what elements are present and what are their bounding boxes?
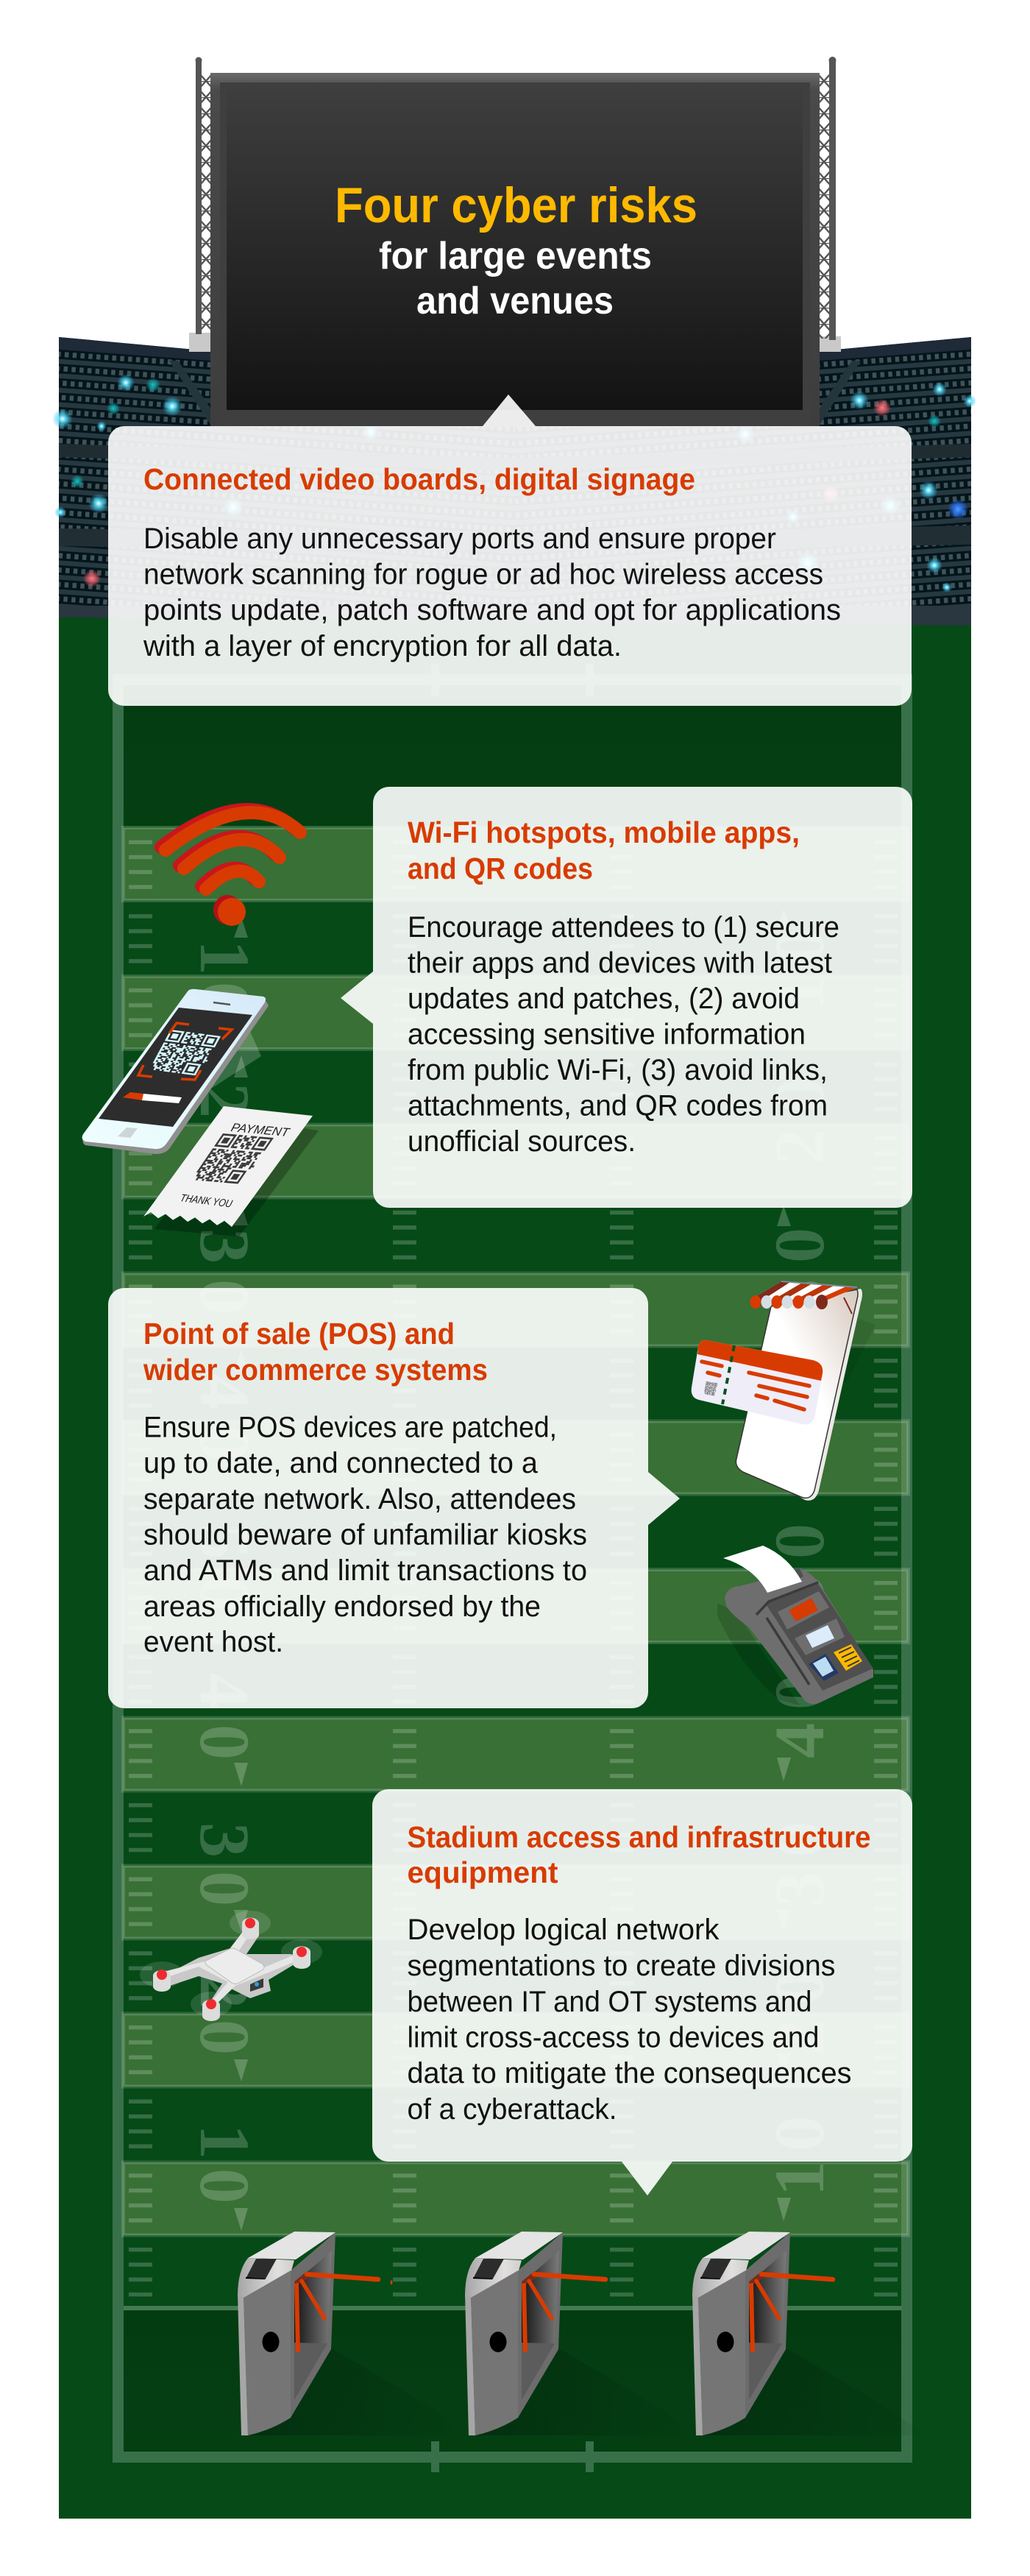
yard numbers left: 5 (185, 1524, 264, 1560)
body text (143, 523, 841, 662)
yard numbers left: 3 (185, 1228, 264, 1264)
panel: wi-fi hotspots (341, 787, 912, 1208)
icon: mobile storefront with ticket (692, 1281, 876, 1501)
yard numbers right: 0 (760, 1970, 839, 2005)
body text: from public Wi-Fi, (3) avoid links, (408, 1054, 828, 1086)
yard numbers left (169, 917, 264, 2231)
body text: Encourage attendees to (1) secure (408, 911, 839, 944)
yard numbers right: 1 (760, 976, 839, 1011)
yard numbers right: 0 (760, 1822, 839, 1857)
yard numbers left: 0 (185, 1426, 264, 1461)
yard numbers right: 1 (760, 2161, 839, 2196)
yard numbers left: 3 (185, 1822, 264, 1858)
yard numbers left: 2 (185, 1083, 264, 1118)
heading (408, 1820, 871, 1889)
panel: stadium access (372, 1789, 912, 2195)
body text: up to date, and connected to a (143, 1447, 539, 1479)
heading: Connected video boards, digital signage (143, 462, 695, 496)
body text: of a cyberattack. (408, 2093, 617, 2126)
body text: accessing sensitive information (408, 1019, 806, 1051)
yard numbers left: 1 (185, 940, 264, 975)
body text: data to mitigate the consequences (408, 2057, 852, 2090)
yard numbers left: 4 (185, 1374, 264, 1409)
icon: drone (140, 1911, 322, 2021)
yard numbers right: 2 (760, 1129, 839, 1164)
icon: turnstile 1 (238, 2232, 471, 2435)
video board with truss (189, 57, 841, 427)
yard numbers left: 0 (185, 2020, 264, 2055)
title: Four cyber risks (335, 177, 697, 233)
body text: Ensure POS devices are patched, (143, 1412, 557, 1444)
yard numbers right: 0 (760, 1228, 839, 1263)
yard numbers right: 0 (760, 1377, 839, 1412)
title: for large events (379, 235, 652, 277)
qr on screen (150, 1030, 220, 1075)
yard numbers right: 2 (760, 2020, 839, 2055)
title: and venues (416, 280, 614, 322)
body text: attachments, and QR codes from (408, 1089, 828, 1122)
yard numbers right: 0 (760, 1524, 839, 1559)
yard numbers left: 0 (185, 1279, 264, 1314)
ticket (692, 1340, 823, 1424)
heading: and QR codes (408, 852, 593, 885)
body text: between IT and OT systems and (408, 1986, 812, 2018)
yard numbers right: 0 (760, 1674, 839, 1710)
yard numbers left: 0 (185, 2168, 264, 2204)
yard numbers left: 1 (185, 2124, 264, 2159)
heading (408, 815, 800, 885)
panel: point of sale (108, 1288, 680, 1708)
heading: Point of sale (POS) and (143, 1317, 455, 1351)
body text (408, 1914, 852, 2126)
stadium stands background (52, 337, 976, 633)
body text: Develop logical network (408, 1914, 720, 1946)
body text: updates and patches, (2) avoid (408, 983, 800, 1015)
body text: and ATMs and limit transactions to (143, 1554, 587, 1587)
body text (143, 1412, 587, 1658)
yard numbers right: 0 (760, 1078, 839, 1113)
body text: unofficial sources. (408, 1125, 636, 1158)
body text: limit cross-access to devices and (408, 2021, 820, 2053)
yard numbers right (760, 909, 839, 2221)
heading (143, 1317, 488, 1387)
yard numbers right: 5 (760, 1576, 839, 1611)
yard numbers left: 0 (185, 1724, 264, 1760)
body text: areas officially endorsed by the (143, 1590, 541, 1623)
yard numbers right: 3 (760, 1279, 839, 1314)
icon: payment receipt (143, 1106, 319, 1236)
yard numbers right: 3 (760, 1872, 839, 1907)
yard numbers left: 0 (185, 1576, 264, 1611)
icon: turnstile 2 (465, 2232, 698, 2435)
body text: network scanning for rogue or ad hoc wireless access (143, 558, 823, 590)
yard numbers right: 4 (760, 1429, 839, 1464)
panel: connected video boards (108, 394, 912, 706)
icon: POS card terminal (717, 1546, 873, 1705)
heading: Wi-Fi hotspots, mobile apps, (408, 815, 800, 849)
yard numbers left: 0 (185, 1871, 264, 1906)
yard numbers left: 0 (185, 982, 264, 1017)
body text: their apps and devices with latest (408, 946, 832, 979)
awning (750, 1281, 857, 1314)
yard numbers right: 0 (760, 2116, 839, 2151)
icon: payment receipt: THANK YOU (179, 1192, 234, 1210)
football field (59, 618, 971, 2519)
heading: Stadium access and infrastructure (408, 1820, 871, 1854)
body text: event host. (143, 1626, 283, 1658)
yard numbers left: 0 (185, 1129, 264, 1164)
heading: equipment (408, 1855, 558, 1889)
body text: Disable any unnecessary ports and ensure proper (143, 523, 776, 555)
body text: should beware of unfamiliar kiosks (143, 1519, 587, 1551)
heading: wider commerce systems (143, 1353, 488, 1387)
body text: segmentations to create divisions (408, 1950, 836, 1982)
icon: phone with QR code (82, 989, 269, 1154)
body text (408, 911, 839, 1158)
icon: payment receipt: PAYMENT (230, 1121, 291, 1139)
yard numbers right: 0 (760, 928, 839, 963)
body text: separate network. Also, attendees (143, 1483, 576, 1515)
yard numbers left: 4 (185, 1673, 264, 1708)
body text: points update, patch software and opt for applications (143, 594, 841, 626)
icon: wi-fi signal (161, 810, 300, 926)
yard numbers left: 2 (185, 1973, 264, 2009)
icon: turnstile 3 (692, 2232, 926, 2435)
title (335, 177, 697, 322)
yard numbers right: 4 (760, 1723, 839, 1758)
body text: with a layer of encryption for all data. (143, 630, 622, 662)
